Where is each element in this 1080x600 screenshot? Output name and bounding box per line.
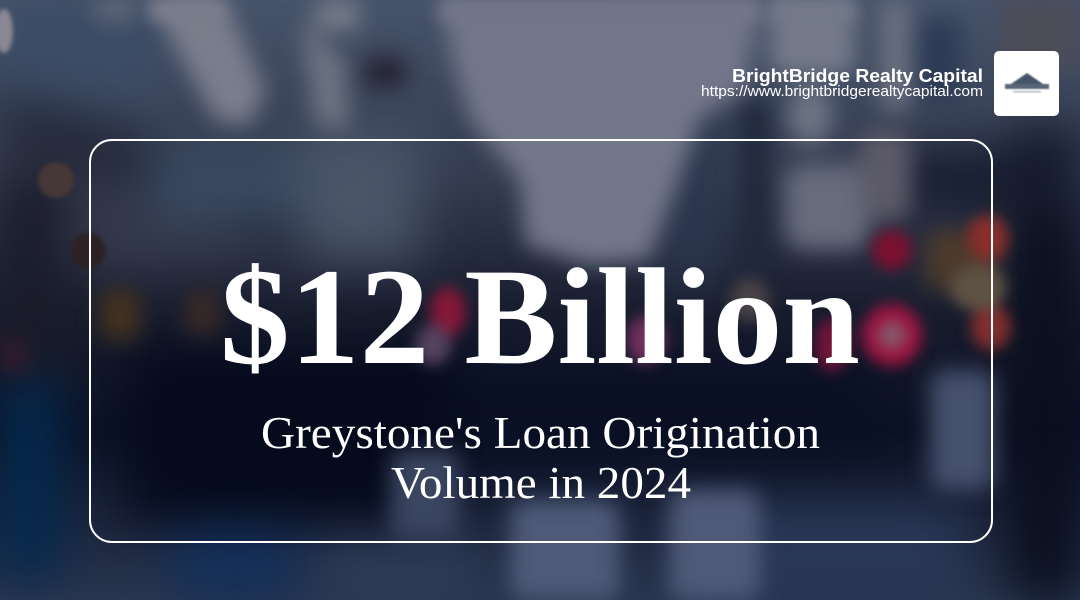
heading: $12 Billion: $12 Billion [220, 240, 860, 393]
website url: https://www.brightbridgerealtycapital.com [701, 84, 983, 100]
company name: BrightBridge Realty Capital [732, 65, 983, 86]
logo tile [994, 51, 1059, 116]
subtitle: Greystone's Loan Origination [261, 407, 820, 458]
subtitle: Volume in 2024 [391, 457, 691, 508]
subtitle [261, 407, 820, 508]
